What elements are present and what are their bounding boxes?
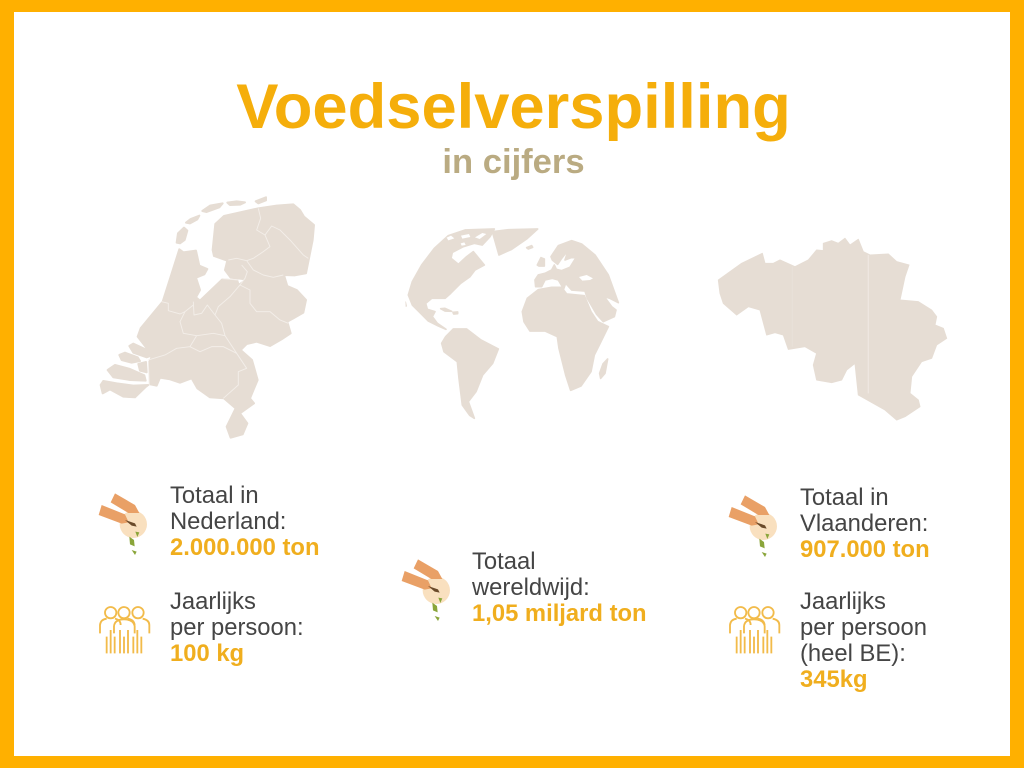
text: per person Netherlands: 100 kg <box>170 640 244 667</box>
map: Belgium <box>718 238 947 420</box>
text: total world: Totaal <box>472 548 536 575</box>
text: total Netherlands: 2.000.000 ton <box>170 534 319 561</box>
text: per person Belgium: (heel BE): <box>800 640 906 667</box>
text: total Netherlands <box>170 482 319 561</box>
text: total world: 1,05 miljard ton <box>472 600 647 627</box>
text: per person Netherlands: Jaarlijks <box>170 588 256 615</box>
text: total world <box>472 548 647 627</box>
icon: plate Flanders <box>729 495 777 557</box>
icon: plate Netherlands <box>99 493 147 555</box>
subtitle: in cijfers <box>442 143 585 181</box>
text: per person Netherlands <box>170 588 304 667</box>
text: total Flanders: Vlaanderen: <box>800 510 928 537</box>
text: total Flanders: Totaal in <box>800 484 889 511</box>
text: total Netherlands: Totaal in <box>170 482 259 509</box>
text: per person Belgium: 345kg <box>800 666 867 693</box>
title: Voedselverspilling <box>236 72 791 142</box>
icon: people Belgium <box>730 607 779 653</box>
text: total Netherlands: Nederland: <box>170 508 286 535</box>
text: total world: wereldwijd: <box>472 574 590 601</box>
icon: plate world <box>402 559 450 621</box>
text: per person Belgium: per persoon <box>800 614 927 641</box>
text: per person Belgium: Jaarlijks <box>800 588 886 615</box>
text: total Flanders: 907.000 ton <box>800 536 930 563</box>
icon: people Netherlands <box>100 607 149 653</box>
map: Netherlands <box>101 197 314 438</box>
text: total Flanders <box>800 484 930 563</box>
map: world globe <box>406 229 618 418</box>
text: per person Netherlands: per persoon: <box>170 614 304 641</box>
text: per person Belgium <box>800 588 927 693</box>
